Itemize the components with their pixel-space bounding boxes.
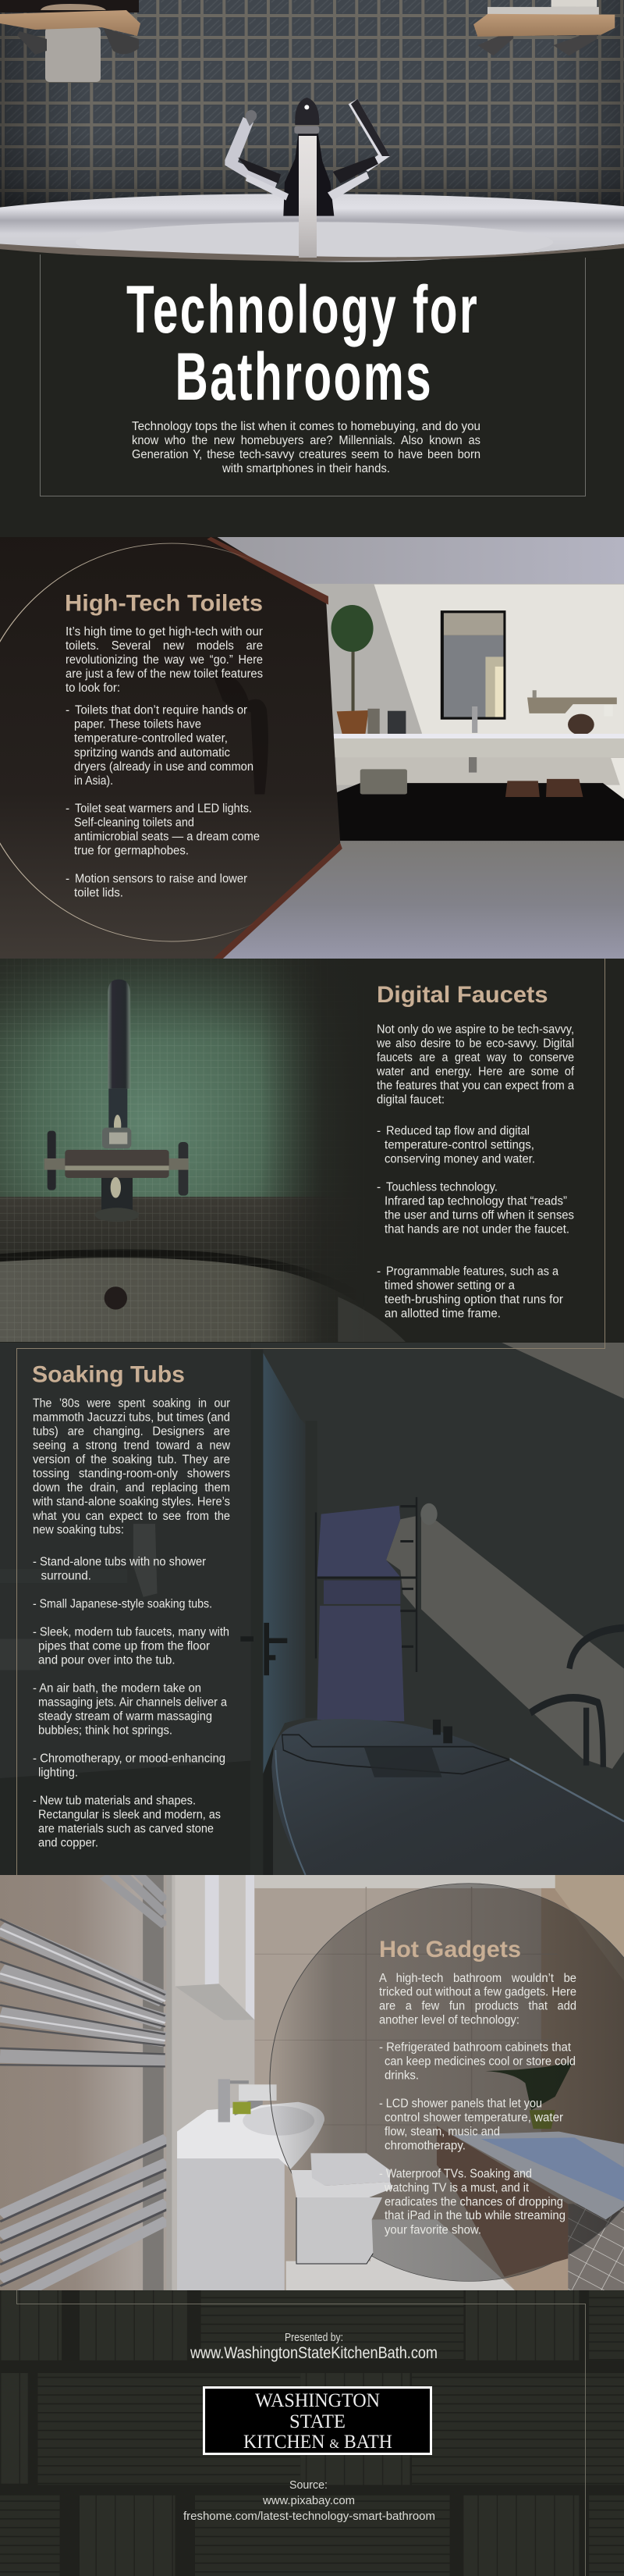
text: faucet introduction: we also desire to be eco-savvy. Digital bbox=[376, 1037, 574, 1051]
list: toilet features: temperature-controlled water, bbox=[74, 732, 228, 745]
text: sources: Source: bbox=[289, 2479, 328, 2492]
icon: floating black cabinet bbox=[314, 769, 624, 841]
overlay: dark circle bbox=[270, 1884, 624, 2281]
icon: sink basin bbox=[0, 194, 624, 262]
heading: Hot Gadgets: Hot Gadgets bbox=[379, 1937, 521, 1962]
photo: dim bathroom with tub bbox=[240, 1343, 624, 1875]
text: gadgets introduction: tricked out without a few gadgets. Here bbox=[379, 1986, 576, 1999]
text: toilet introduction: are just a few of the new toilet features bbox=[66, 667, 263, 681]
panel: digital faucets bbox=[0, 959, 624, 1343]
text: faucet introduction: Not only do we aspire to be tech-savvy, bbox=[377, 1023, 574, 1036]
list: toilet features: antimicrobial seats — a dream come bbox=[74, 831, 260, 844]
text: gadgets introduction: another level of technology: bbox=[379, 2014, 519, 2026]
title: Technology for bbox=[126, 272, 479, 347]
icon: bathtub bbox=[271, 1719, 624, 1875]
logo: Washington State Kitchen & Bath: STATE bbox=[289, 2411, 346, 2432]
heading: Soaking Tubs: Soaking Tubs bbox=[32, 1361, 185, 1387]
text: presented by bbox=[190, 2332, 438, 2362]
heading: Digital Faucets: Digital Faucets bbox=[377, 982, 548, 1008]
list: toilet features bbox=[66, 704, 260, 899]
background: dark wall bbox=[0, 531, 340, 968]
list: toilet features: Toilet seat warmers and LED lights. bbox=[75, 802, 252, 816]
icon: stone counter bbox=[310, 734, 624, 757]
list: soaking tub features: are materials such as carved stone bbox=[38, 1823, 214, 1836]
list: gadgets: control shower temperature, water bbox=[385, 2111, 563, 2125]
list: soaking tub features: - An air bath, the modern take on bbox=[33, 1681, 201, 1695]
list: soaking tub features: and copper. bbox=[38, 1836, 98, 1850]
list: faucet features: temperature-control settings, bbox=[385, 1139, 534, 1152]
icon: faucet bbox=[44, 980, 189, 1222]
icon: tub panel bbox=[437, 2126, 568, 2277]
text: toilet introduction: It’s high time to get high-tech with our bbox=[66, 625, 263, 639]
list: soaking tub features: bubbles; think hot springs. bbox=[38, 1724, 172, 1737]
text: soaking tubs introduction: what you can expect to see from the bbox=[32, 1510, 230, 1523]
text: faucet introduction: faucets are a great way to conserve bbox=[377, 1051, 574, 1065]
list: soaking tub features: pipes that come up from the floor bbox=[38, 1640, 210, 1653]
list: faucet features: Touchless technology. bbox=[386, 1181, 498, 1194]
list: faucet features: - bbox=[377, 1125, 381, 1138]
text: gadgets introduction: A high-tech bathroom wouldn’t be bbox=[379, 1972, 576, 1985]
list: toilet features: spritzing wands and automatic bbox=[74, 746, 230, 760]
text: presented by: Presented by: bbox=[285, 2332, 343, 2344]
icon: mirror bbox=[441, 610, 505, 720]
text: soaking tubs introduction: tubs) are changing. Designers are bbox=[33, 1425, 230, 1438]
text: faucet introduction: digital faucet: bbox=[377, 1094, 445, 1107]
list: faucet features: an allotted time frame. bbox=[385, 1308, 501, 1321]
overlay: text column bbox=[0, 1343, 624, 1889]
logo: Washington State Kitchen & Bath bbox=[204, 2387, 431, 2454]
icon: towel rack bbox=[316, 1497, 438, 1721]
text: faucet introduction: water and energy. Here are some of bbox=[376, 1066, 575, 1079]
list: gadgets: flow, steam, music and bbox=[385, 2125, 500, 2138]
panel: soaking tubs bbox=[0, 1343, 624, 1889]
list: soaking tub features bbox=[33, 1555, 229, 1850]
text: toilet introduction bbox=[66, 625, 263, 695]
list: toilet features: in Asia). bbox=[74, 774, 113, 788]
list: soaking tub features: steady stream of warm massaging bbox=[38, 1710, 212, 1724]
text: introduction bbox=[132, 420, 480, 475]
list: faucet features: Reduced tap flow and digital bbox=[386, 1125, 530, 1138]
text: gadgets introduction bbox=[379, 1972, 576, 2026]
photo: modern bathroom vanity bbox=[0, 531, 624, 968]
list: faucet features: the user and turns off when it senses bbox=[385, 1209, 574, 1222]
list: faucet features: timed shower setting or a bbox=[385, 1279, 515, 1293]
icon: sink and faucet bbox=[177, 2079, 324, 2169]
icon: potted plant bbox=[331, 605, 374, 735]
text: soaking tubs introduction: down the drain, and replacing them bbox=[33, 1482, 230, 1495]
text: soaking tubs introduction: tossing standing-room-only showers bbox=[33, 1467, 230, 1480]
icon: wall cabinet bbox=[175, 1873, 255, 2020]
list: gadgets bbox=[379, 2041, 576, 2237]
text: sources bbox=[183, 2479, 435, 2523]
list: toilet features: Motion sensors to raise and lower bbox=[75, 873, 247, 886]
list: soaking tub features: - Chromotherapy, or mood-enhancing bbox=[33, 1752, 225, 1766]
list: soaking tub features: - New tub materials and shapes. bbox=[33, 1794, 196, 1808]
list: gadgets: - Refrigerated bathroom cabinets that bbox=[379, 2041, 572, 2055]
list: gadgets: your favorite show. bbox=[385, 2223, 481, 2237]
list: soaking tub features: - Stand-alone tubs with no shower bbox=[33, 1555, 206, 1568]
panel: high-tech toilets bbox=[0, 531, 624, 968]
text: introduction: Generation Y, these tech-savvy creatures seem to have been born bbox=[132, 448, 480, 461]
panel: hot gadgets bbox=[0, 1871, 624, 2303]
text: introduction: with smartphones in their hands. bbox=[222, 462, 390, 475]
list: gadgets: - LCD shower panels that let you bbox=[379, 2097, 542, 2111]
list: soaking tub features: - Small Japanese-style soaking tubs. bbox=[33, 1597, 212, 1610]
panel: hero bbox=[0, 0, 624, 537]
photo: sink with running faucet bbox=[0, 0, 624, 262]
list: gadgets: can keep medicines cool or store cold bbox=[385, 2055, 576, 2069]
list: faucet features bbox=[377, 1125, 574, 1321]
list: gadgets: drinks. bbox=[385, 2069, 419, 2083]
list: faucet features: - bbox=[377, 1265, 381, 1279]
text: soaking tubs introduction: new soaking tubs: bbox=[33, 1524, 124, 1537]
icon: water stream bbox=[299, 136, 317, 258]
list: gadgets: chromotherapy. bbox=[385, 2140, 466, 2153]
photo: bathroom with towel rail bbox=[0, 1871, 624, 2303]
title: Bathrooms bbox=[175, 339, 433, 415]
icon: toilet and bathtub bbox=[291, 2126, 624, 2277]
list: faucet features: teeth-brushing option that runs for bbox=[385, 1293, 563, 1307]
icon: right shelf with soap bbox=[473, 0, 615, 55]
list: toilet features: - bbox=[66, 873, 69, 886]
text: toilet introduction: toilets. Several new models are bbox=[66, 639, 263, 653]
list: soaking tub features: surround. bbox=[41, 1570, 91, 1583]
list: toilet features: - bbox=[66, 802, 69, 816]
list: gadgets: watching TV is a must, and it bbox=[384, 2181, 530, 2194]
heading: High-Tech Toilets: High-Tech Toilets bbox=[65, 590, 263, 617]
list: faucet features: Infrared tap technology that “reads” bbox=[385, 1195, 567, 1208]
icon: towel rail bars bbox=[0, 1871, 167, 2295]
background: dark parquet texture bbox=[0, 2279, 624, 2576]
background: dark title panel bbox=[72, 254, 365, 262]
list: toilet features: paper. These toilets have bbox=[74, 718, 201, 731]
frame: title outline bbox=[41, 254, 585, 496]
list: gadgets: eradicates the chances of dropping bbox=[385, 2195, 563, 2208]
list: soaking tub features: and pour over into the tub. bbox=[38, 1654, 175, 1667]
icon: toilet bbox=[291, 2153, 392, 2264]
text: sources: freshome.com/latest-technology-smart-bathroom bbox=[183, 2510, 435, 2523]
text: soaking tubs introduction: version of the soaking tub. They are bbox=[33, 1453, 230, 1466]
text: faucet introduction: the features that you can expect from a bbox=[377, 1080, 574, 1093]
icon: faucet bbox=[225, 98, 390, 216]
list: toilet features: true for germaphobes. bbox=[74, 845, 189, 858]
list: faucet features: - bbox=[377, 1181, 381, 1194]
text: introduction: know who the new homebuyers are? Millennials. Also known as bbox=[132, 434, 480, 447]
icon: tub rim and water bbox=[452, 2132, 624, 2219]
list: gadgets: that iPad in the tub while streaming bbox=[385, 2209, 566, 2222]
icon: drain bbox=[105, 1286, 127, 1310]
list: toilet features: Self-cleaning toilets and bbox=[74, 817, 194, 830]
text: soaking tubs introduction: The ’80s were spent soaking in our bbox=[33, 1397, 230, 1411]
photo: green tiled faucet bbox=[0, 959, 406, 1342]
text: toilet introduction: revolutionizing the way we “go.” Here bbox=[66, 653, 263, 667]
list: soaking tub features: lighting. bbox=[38, 1766, 78, 1779]
text: toilet introduction: to look for: bbox=[66, 681, 120, 695]
icon: door bbox=[240, 1350, 300, 1875]
logo: Washington State Kitchen & Bath: WASHINGTON bbox=[255, 2390, 380, 2411]
floor and mosaic bbox=[286, 2204, 624, 2290]
logo: Washington State Kitchen & Bath: KITCHEN & BATH bbox=[243, 2432, 392, 2453]
text: presented by: www.WashingtonStateKitchenBath.com bbox=[190, 2344, 438, 2362]
panel: footer bbox=[0, 2279, 624, 2576]
text: soaking tubs introduction bbox=[32, 1397, 231, 1537]
icon: tub faucets bbox=[530, 1628, 624, 1767]
text: faucet introduction bbox=[376, 1023, 575, 1107]
outline: circle bbox=[0, 543, 251, 941]
icon: left shelf with cup bbox=[0, 0, 140, 82]
list: soaking tub features: massaging jets. Air channels deliver a bbox=[38, 1696, 227, 1710]
list: soaking tub features: Rectangular is sleek and modern, as bbox=[38, 1808, 221, 1821]
frame: thin gold outlines between sections bbox=[17, 959, 605, 2576]
list: soaking tub features: - Sleek, modern tub faucets, many with bbox=[33, 1625, 229, 1638]
list: toilet features: Toilets that don’t require hands or bbox=[75, 704, 247, 717]
text: soaking tubs introduction: seeing a strong trend toward a new bbox=[33, 1439, 231, 1453]
text: sources: www.pixabay.com bbox=[262, 2495, 355, 2507]
list: faucet features: Programmable features, such as a bbox=[386, 1265, 558, 1279]
text: introduction: Technology tops the list when it comes to homebuying, and do you bbox=[132, 420, 480, 433]
title bbox=[126, 284, 477, 400]
icon: sink pedestal bbox=[177, 2156, 285, 2295]
list: gadgets: - Waterproof TVs. Soaking and bbox=[379, 2167, 532, 2181]
list: faucet features: conserving money and water. bbox=[385, 1153, 535, 1166]
icon: houseplant bbox=[485, 2062, 573, 2129]
text: soaking tubs introduction: mammoth Jacuzzi tubs, but times (and bbox=[33, 1411, 230, 1424]
list: toilet features: - bbox=[66, 704, 69, 717]
list: toilet features: dryers (already in use and common bbox=[74, 760, 254, 774]
text: soaking tubs introduction: with stand-alone soaking styles. Here’s bbox=[32, 1496, 230, 1508]
list: faucet features: that hands are not under the faucet. bbox=[385, 1223, 569, 1236]
list: toilet features: toilet lids. bbox=[74, 887, 123, 899]
text: gadgets introduction: are a few fun products that add bbox=[379, 2000, 576, 2013]
